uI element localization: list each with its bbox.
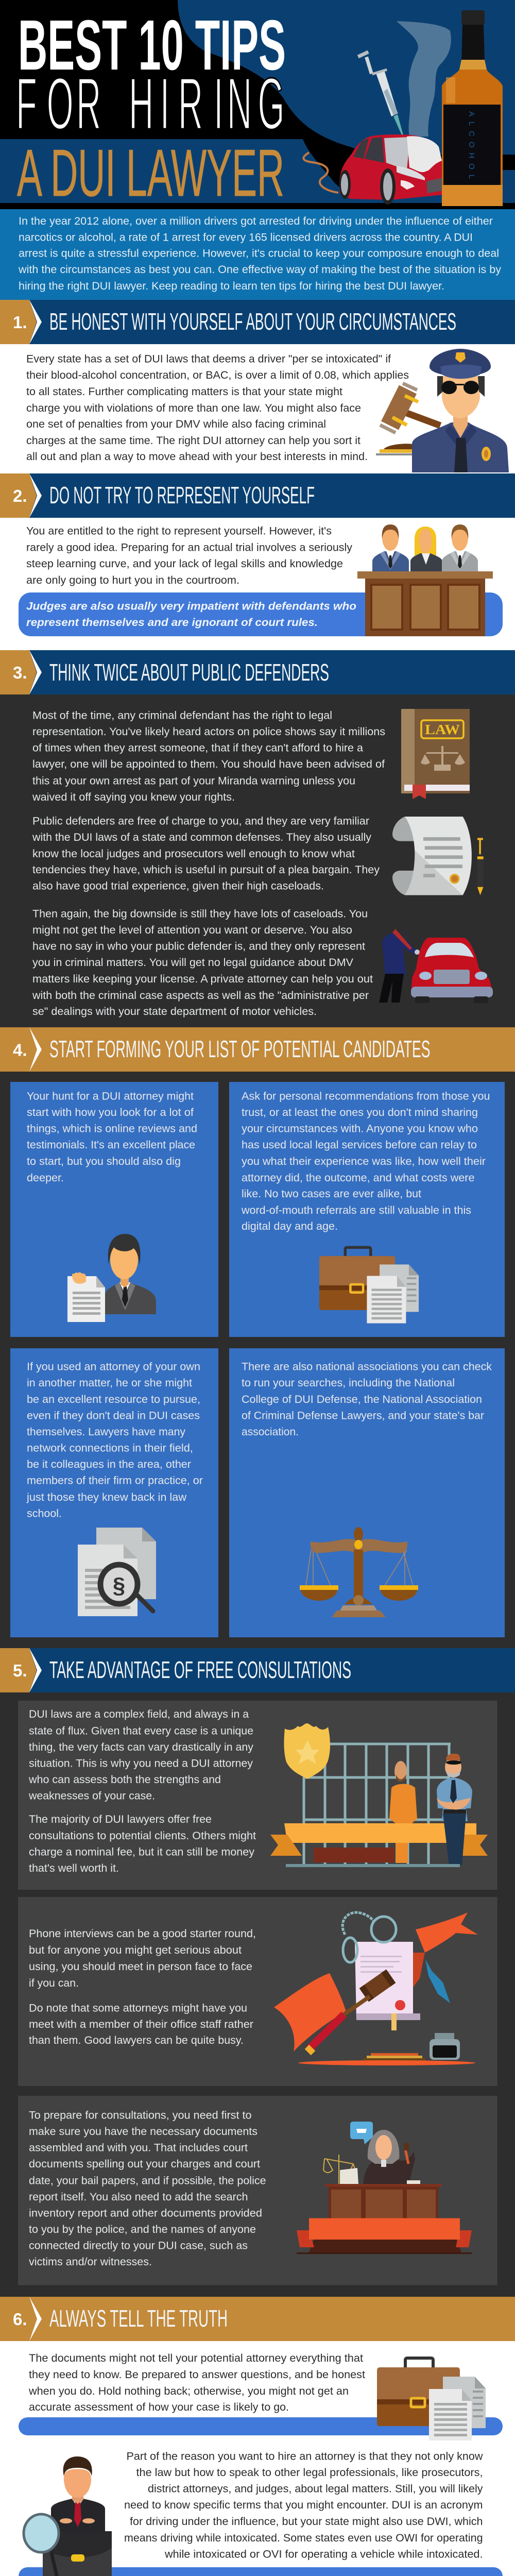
text: phone interviews: Do note that some attorneys might have you [29,2002,247,2014]
background: upper-right blue shape [178,0,515,203]
icon: briefcase with documents [377,2358,486,2441]
heading: tip 1: 1. [13,313,27,332]
text: phone interviews: if you can. [29,1977,79,1989]
text: tip 1 body: all out and plan a way to move ahead with your best interests in mind. [26,451,368,463]
text: terms paragraph: while intoxicated or OVI for operating a vehicle while intoxicated. [164,2548,483,2561]
icon: thief and car [379,929,493,1003]
icon: gavel [376,383,440,455]
card: phone interviews [18,1897,497,2086]
text: terms paragraph: means driving while intoxicated. Some states even use OWI for operating [124,2532,483,2544]
text: prepare documents: make sure you have the necessary documents [29,2126,258,2138]
heading: tip 6: ALWAYS TELL THE TRUTH [49,2305,228,2332]
heading: tip 4: 4. [13,1041,27,1059]
icon: scales of justice [300,1527,418,1617]
heading: tip 6: 6. [13,2310,27,2329]
text: complex field: situation. This is why you need a DUI attorney [29,1758,253,1769]
text: your own attorney: be it colleagues in the area, other [27,1459,191,1470]
text: prepare documents: victims and/or witnesses. [29,2256,152,2268]
icon: syringe [357,50,403,135]
icon: smoke [397,21,451,137]
icon: judge at bench [297,2122,472,2254]
text: tip 2 body: steep learning curve, and your lack of legal skills and knowledge [26,558,343,570]
card: your own attorney [10,1348,218,1637]
text: personal recommendations: has used local legal services before can relay to [242,1139,477,1151]
text: online reviews: to start, but you should also dig [27,1156,181,1167]
text: tip 3 paragraph 3: with both the criminal case aspects as well as the "administrative per [32,990,369,1002]
text: national associations: to run your searches, including the National [242,1377,455,1389]
heading: tip 3: 3. [13,663,27,682]
icon: law book [401,709,470,799]
icon: court order with gavel, handcuffs and ink [274,1912,478,2065]
panel: introduction: arrest is quite a stressful experience. However, it's crucial to keep your composure enough to deal [19,248,499,260]
text: phone interviews: than them. Good lawyers can be quite busy. [29,2035,244,2046]
text: your own attorney: network connections in their field, [27,1443,193,1454]
text: tip 3 paragraph 1: of times when they arrest someone, that if they can't afford to hire a [32,742,363,754]
text: online reviews: Your hunt for a DUI attorney might [27,1090,194,1102]
text: personal recommendations: your circumstances with. Anyone you know who [242,1123,478,1134]
icon: alcohol bottle [442,10,503,206]
text: your own attorney: just those they knew back in law [26,1492,187,1503]
panel: introduction: hiring the right DUI lawyer. Keep reading to learn ten tips for hiring the best DUI lawyer. [19,280,444,292]
text: personal recommendations: attorney did, the outcome, and what costs were [242,1172,475,1184]
heading: tip 1 [0,300,515,344]
text: tip 2 body: You are entitled to the right to represent yourself. However, it's [26,526,332,537]
text: tip 3 paragraph 2: Public defenders are free of charge to you, and they are very familiar [32,815,369,827]
text: documents paragraph: they need to know. Be prepared to answer questions, and be honest [29,2369,365,2381]
text: documents paragraph: when you do. Hold nothing back; otherwise, you might not get an [28,2385,349,2397]
text: complex field: consultations to potential clients. Others might [29,1830,256,1842]
text: prepare documents: date, your bail papers, and if possible, the police [29,2175,266,2187]
text: personal recommendations: you what their experience was like, how well their [242,1156,486,1167]
text: tip 2 body: rarely a good idea. Preparing for an actual trial involves a seriously [26,542,353,553]
text: tip 3 paragraph 1: representation. You've likely heard actors on police shows say it millions [32,726,385,738]
text: personal recommendations [241,1090,490,1232]
text: national associations: College of DUI Defense, the National Association [242,1394,482,1405]
text: your own attorney: school. [27,1507,62,1520]
text: tip 3 paragraph 3: matters like keeping your license. A private attorney can help you out [32,973,373,985]
text: your own attorney: themselves. Lawyers have many [27,1426,185,1438]
text: tip 1 body [26,353,409,463]
text: tip 1 body: to all states. Further complicating matters is that your state might [26,386,342,398]
panel: introduction: with the circumstances as best you can. One effective way of making the best of the situation is by [18,264,502,276]
heading: tip 6 [0,2297,515,2341]
text: tip 3 paragraph 3: have no say in who your public defender is, and they only represent [32,941,365,952]
text: online reviews: things, which is online reviews and [27,1123,197,1134]
text: tip 3 paragraph 1: lawyer, one will be appointed to them. You should have been advised of [32,758,385,770]
text: prepare documents: documents spelling out your charges and court [29,2158,260,2170]
text: complex field: charge a nominal fee, but it can still be money [29,1846,255,1858]
card: personal recommendations [229,1082,505,1337]
text: tip 3 paragraph 2: with the DUI laws of a state and common defenses. They also usually [32,832,372,843]
panel: introduction [0,209,515,300]
heading: tip 5: 5. [13,1661,27,1680]
icon: documents and magnifier: § [113,1573,125,1598]
text: terms paragraph: district attorneys, and judges, about legal matters. Still, you will likely [148,2483,483,2495]
text: tip 3 paragraph 2: tendencies they have, which is useful in pursuit of a plea bargain. They [32,864,380,876]
text: documents paragraph [28,2352,365,2413]
icon: briefcase and documents [319,1247,419,1323]
text: terms paragraph: Part of the reason you want to hire an attorney is that they not only know [127,2451,483,2463]
heading: tip 3 [0,650,515,694]
text: prepare documents: report itself. You also need to add the search [29,2191,248,2203]
icon: crashed red car [339,134,443,205]
card: complex field [18,1701,497,1890]
text: phone interviews: using, you should meet in person face to face [29,1961,252,1973]
text: tip 1 body: charge you with violations of more than one law. You might also face [26,402,361,414]
card: prepare documents [18,2096,497,2285]
text: your own attorney: even if they don't deal in DUI cases [27,1410,200,1422]
text: personal recommendations: like. No two cases are ever alike, but [242,1188,421,1200]
text: documents paragraph: The documents might not tell your potential attorney everything that [29,2352,363,2364]
text: tip 3 paragraph 3: se" dealings with your state department of motor vehicles. [32,1006,317,1018]
panel: tip 5 [0,1648,515,2297]
text: tip 3 paragraph 3 [32,908,373,1018]
panel: introduction: narcotics or alcohol, a rate of 1 arrest for every 165 licensed drivers across the country. A DUI [19,232,473,244]
text: personal recommendations: Ask for personal recommendations from those you [242,1090,490,1102]
text: phone interviews: Phone interviews can be a good starter round, [29,1928,256,1940]
panel: tip 2 [0,473,515,650]
title line 2: FOR HIRING [16,63,284,145]
text: online reviews: deeper. [27,1172,64,1184]
text: tip 3 paragraph 2 [32,815,380,892]
text: national associations: of Criminal Defense Lawyers, and your state's bar [242,1410,484,1422]
panel: tip 3 [0,650,515,1027]
text: tip 3 paragraph 1: waived it off saying you knew your rights. [32,791,235,803]
text: tip 1 body: one set of penalties from your DMV while also facing criminal [26,418,326,430]
heading: tip 2: DO NOT TRY TO REPRESENT YOURSELF [49,482,315,509]
text: complex field: DUI laws are a complex field, and always in a [29,1708,249,1720]
text: prepare documents: inventory report and other documents provided [29,2207,262,2219]
text: online reviews: start with how you look for a lot of [27,1107,194,1118]
text: tip 3 paragraph 3: might not get the level of attention you want or deserve. You also [32,924,352,936]
text: tip 3 paragraph 2: also have good trial experience, given their high caseloads. [32,880,324,892]
card: national associations [229,1348,505,1637]
icon: alcohol bottle: ALCOHOL [467,111,476,179]
icon: lawyer with magnifier and briefcase [24,2456,112,2576]
icon: scroll and pen [392,817,484,895]
text: complex field: that's well worth it. [29,1862,119,1874]
heading: tip 2 [0,473,515,518]
title line 1: BEST 10 TIPS [18,6,286,85]
text: tip 1 body: charges at the same time. The right DUI attorney can help you sort it [26,435,360,447]
text: your own attorney: If you used an attorney of your own [27,1361,200,1373]
text: tip 1 body: their blood-alcohol concentration, or BAC, is over a limit of 0.08, which applies [26,369,409,381]
callout: judges: represent themselves and are ignorant of court rules. [26,617,318,629]
text: prepare documents: connected directly to your DUI case, such as [29,2240,248,2251]
panel: tip 6 [0,2297,515,2576]
text: prepare documents: assembled and with you. That includes court [29,2142,248,2154]
text: phone interviews [29,1928,256,2046]
icon: documents and magnifier [78,1528,156,1616]
icon: skid marks [303,152,338,193]
text: tip 2 body: are only going to hurt you in the courtroom. [26,574,239,586]
text: your own attorney: members of their firm or practice, or [27,1475,203,1487]
text: personal recommendations: word-of-mouth referrals are still valuable in this [241,1205,471,1216]
text: tip 3 paragraph 1: Most of the time, any criminal defendant has the right to legal [32,710,332,722]
card: online reviews [10,1082,218,1337]
icon: lawyer with document [67,1234,156,1322]
text: prepare documents: to you by the police, and the names of anyone [29,2224,256,2235]
text: your own attorney: in another matter, he or she might [27,1377,192,1389]
text: national associations: There are also national associations you can check [242,1361,492,1373]
heading: tip 2: 2. [13,486,27,505]
decorative bar [19,2567,503,2576]
callout: judges [19,592,503,636]
text: tip 3 paragraph 1: this at your own arrest as part of your Miranda warning unless you [32,775,355,787]
text: national associations [242,1361,492,1438]
text: terms paragraph: for driving under the influence, but your state might also use DWI, which [130,2516,483,2528]
text: your own attorney [26,1361,203,1520]
decorative bar [19,2417,503,2435]
heading: tip 5 [0,1648,515,1692]
text: personal recommendations: trust, or at least the ones you don't mind sharing [242,1107,478,1118]
text: prepare documents: To prepare for consultations, you need first to [29,2110,251,2122]
text: complex field: The majority of DUI lawyers offer free [29,1814,212,1825]
panel: hero banner [0,0,515,210]
panel: tip 4 [0,1027,515,1648]
text: prepare documents [29,2110,266,2268]
text: tip 2 body [26,526,353,586]
text: phone interviews: but for anyone you might get serious about [29,1944,242,1956]
text: tip 3 paragraph 3: Then again, the big downside is still they have lots of caseloads. You [32,908,368,920]
text: complex field: thing, the very facts can vary drastically in any [29,1741,254,1753]
text: online reviews: testimonials. It's an excellent place [27,1139,195,1151]
heading: tip 4 [0,1027,515,1072]
callout: judges: Judges are also usually very impatient with defendants who [26,601,356,612]
text: complex field [28,1708,256,1874]
text: complex field: weaknesses of your case. [28,1790,155,1802]
text: documents paragraph: accurate assessment of how your case is likely to go. [29,2401,289,2413]
background: title band [0,139,356,203]
icon: jury [357,524,493,636]
text: personal recommendations: digital day and age. [242,1221,338,1232]
text: tip 1 body: Every state has a set of DUI laws that deems a driver "per se intoxicated" if [26,353,391,365]
title line 3: A DUI LAWYER [17,136,284,210]
text: complex field: state of flux. Given that every case is a unique [29,1725,253,1737]
icon: jail with badge, prisoner and guard [270,1723,488,1867]
icon: police officer [412,349,509,472]
text: phone interviews: meet with a member of their office staff rather [29,2019,253,2030]
text: complex field: who can assess both the strengths and [28,1774,221,1786]
text: terms paragraph [124,2451,483,2561]
text: online reviews [27,1090,197,1184]
text: tip 3 paragraph 3: you in criminal matters. You will get no legal guidance about DMV [32,957,353,969]
panel: introduction: In the year 2012 alone, over a million drivers got arrested for driving under the influence of either [19,215,493,227]
text: tip 3 paragraph 2: know the local judges and prosecutors well enough to know what [32,848,355,860]
text: terms paragraph: need to know specific terms that you might encounter. DUI is an acronym [124,2499,483,2511]
text: terms paragraph: the law but how to speak to other legal professionals, like prosecutors, [136,2467,483,2479]
text: tip 3 paragraph 1 [32,710,385,803]
text: national associations: association. [242,1426,299,1438]
text: your own attorney: be an excellent resource to pursue, [27,1394,200,1405]
panel: tip 1 [0,300,515,473]
